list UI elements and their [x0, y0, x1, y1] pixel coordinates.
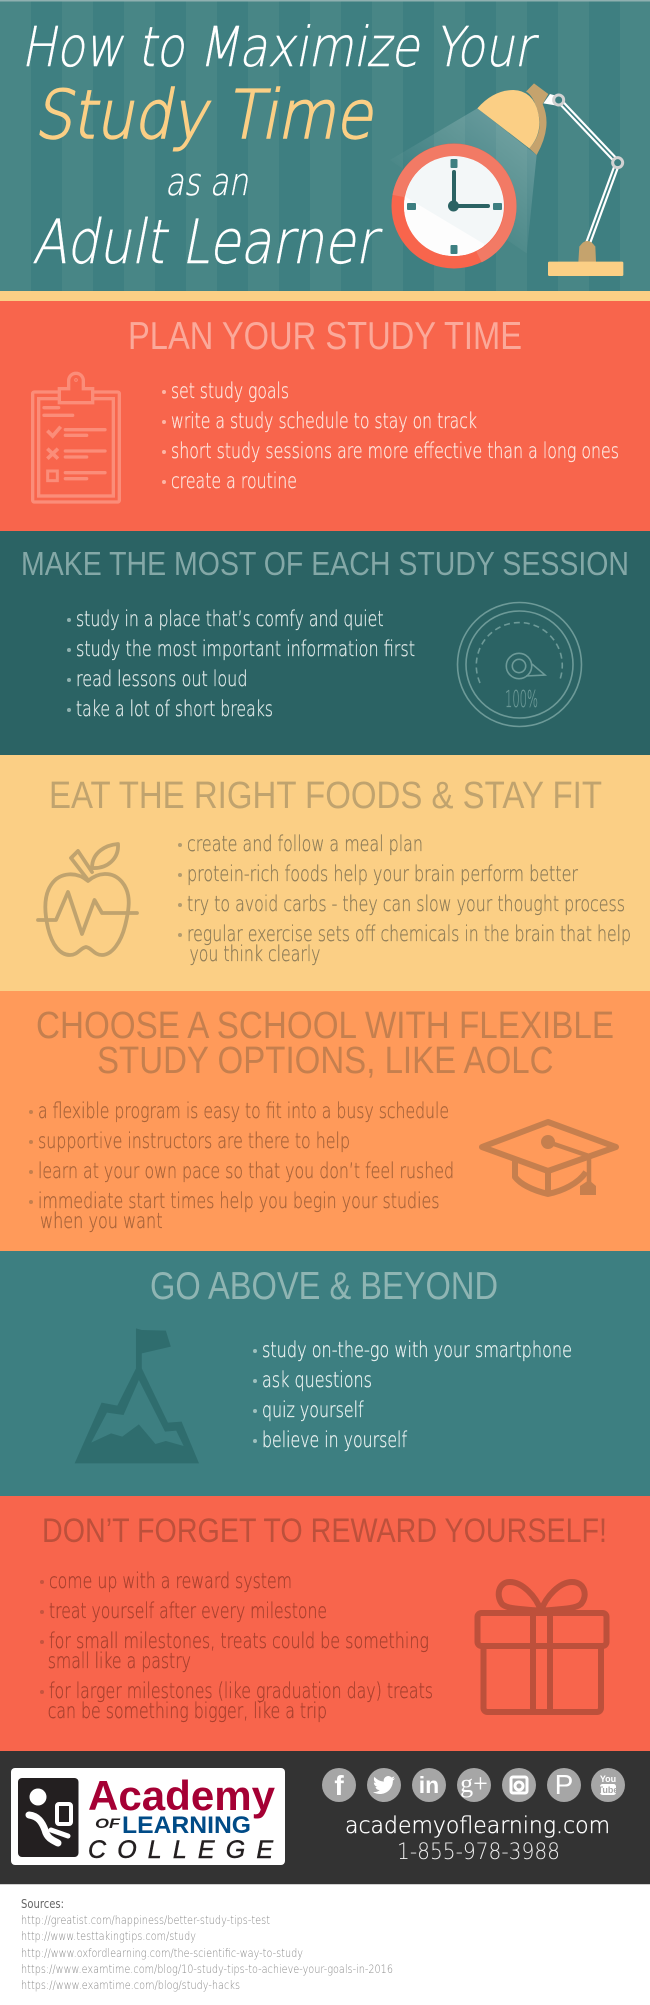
bullet list: supportive instructors are there to help [38, 1129, 350, 1154]
icon: gauge [458, 602, 582, 726]
website and phone: academyoflearning.com [345, 1813, 610, 1839]
bullet list: learn at your own pace so that you don’t feel rushed [38, 1159, 454, 1184]
sources: http://www.testtakingtips.com/study [21, 1929, 196, 1943]
sources: http://greatist.com/happiness/better-study-tips-test [21, 1913, 270, 1927]
bullet list: immediate start times help you begin your studies [38, 1189, 440, 1214]
title: How to Maximize Your [18, 15, 543, 80]
sources: Sources: [21, 1897, 64, 1911]
logo: Academy of Learning College: LEARNING [122, 1812, 251, 1839]
bullet list: for small milestones, treats could be something [49, 1629, 429, 1654]
bullet list [162, 379, 619, 494]
title: Study Time [31, 76, 384, 154]
logo: Academy of Learning College: OF [95, 1815, 121, 1831]
title: Adult Learner [29, 207, 388, 278]
logo: Academy of Learning College: COLLEGE [88, 1836, 273, 1864]
bullet list: quiz yourself [262, 1398, 364, 1423]
panel: reward yourself [0, 1496, 650, 1751]
sources [21, 1897, 393, 1992]
social media icons: Tube [598, 1785, 618, 1795]
bullet list: read lessons out loud [76, 667, 248, 692]
panel: go above and beyond [0, 1251, 650, 1496]
heading: PLAN YOUR STUDY TIME [128, 315, 522, 358]
social media icons: P [555, 1769, 573, 1800]
icon: mountain with flag [75, 1328, 199, 1463]
social media icons: g+ [460, 1769, 488, 1798]
panel: eat the right foods and stay fit [0, 755, 650, 991]
bullet list [253, 1338, 572, 1453]
logo: Academy of Learning College: Academy [88, 1772, 276, 1819]
social media icons [322, 1768, 625, 1802]
bullet list: for larger milestones (like graduation day) treats [49, 1679, 433, 1704]
heading [36, 1005, 614, 1082]
sources: http://www.oxfordlearning.com/the-scientific-way-to-study [21, 1946, 303, 1960]
panel: make the most of each study session [0, 531, 650, 755]
bullet list [178, 832, 631, 967]
icon: apple with pulse [38, 844, 137, 955]
bullet list: believe in yourself [262, 1428, 407, 1453]
logo: Academy of Learning College [11, 1768, 285, 1865]
icon: graduation cap [482, 1122, 616, 1195]
icon: gift box [478, 1582, 606, 1712]
bullet list: create and follow a meal plan [187, 832, 423, 857]
bullet list: come up with a reward system [49, 1569, 292, 1594]
bullet list: when you want [40, 1209, 162, 1234]
icon: gauge: 100% [505, 687, 538, 713]
panel: choose a school [0, 991, 650, 1251]
bullet list: write a study schedule to stay on track [171, 409, 477, 434]
bullet list [29, 1099, 454, 1234]
panel: header [0, 0, 650, 301]
bullet list [40, 1569, 433, 1724]
bullet list: set study goals [171, 379, 289, 404]
panel: plan your study time [0, 301, 650, 531]
website and phone [345, 1813, 610, 1865]
bullet list: small like a pastry [48, 1649, 191, 1674]
heading: STUDY OPTIONS, LIKE AOLC [97, 1040, 554, 1082]
bullet list: study in a place that’s comfy and quiet [76, 607, 384, 632]
icon: clipboard [33, 373, 119, 502]
icon: desk lamp [390, 83, 623, 276]
sources: https://www.examtime.com/blog/10-study-tips-to-achieve-your-goals-in-2016 [21, 1962, 393, 1976]
bullet list: can be something bigger, like a trip [48, 1699, 327, 1724]
heading: GO ABOVE & BEYOND [150, 1265, 498, 1308]
bullet list: study the most important information first [76, 637, 415, 662]
bullet list: create a routine [171, 469, 297, 494]
social media icons: in [419, 1772, 439, 1798]
bullet list: treat yourself after every milestone [49, 1599, 327, 1624]
social media icons: f [334, 1770, 344, 1801]
bullet list [67, 607, 415, 722]
bullet list: take a lot of short breaks [76, 697, 273, 722]
bullet list: a flexible program is easy to fit into a busy schedule [38, 1099, 449, 1124]
icon: clock [392, 144, 516, 268]
social media icons: You [600, 1774, 616, 1784]
title [18, 15, 543, 278]
bullet list: ask questions [262, 1368, 372, 1393]
panel: footer [0, 1751, 650, 1885]
bullet list: you think clearly [190, 942, 320, 967]
website and phone: 1-855-978-3988 [397, 1840, 560, 1865]
title: as an [163, 160, 255, 205]
sources: https://www.examtime.com/blog/study-hacks [21, 1978, 240, 1992]
